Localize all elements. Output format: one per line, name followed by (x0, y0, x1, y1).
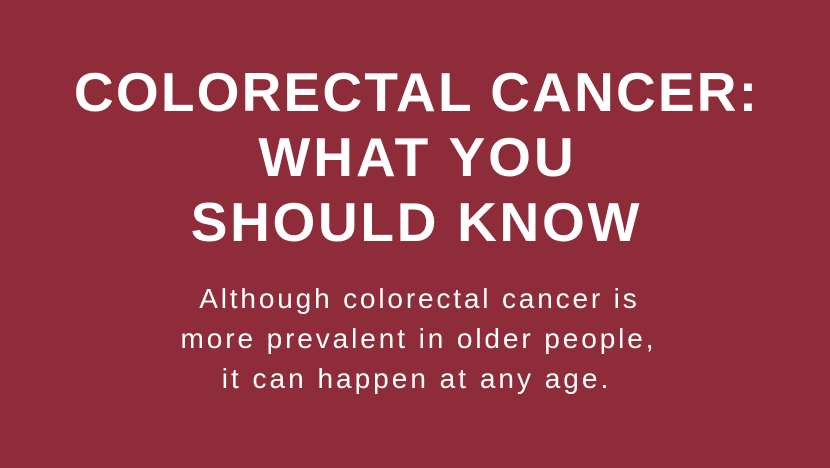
title: WHAT YOU (258, 126, 577, 188)
subtitle text (181, 283, 656, 394)
subtitle text: more prevalent in older people, (181, 323, 656, 354)
title: SHOULD KNOW (191, 191, 642, 253)
title: COLORECTAL CANCER: (74, 61, 759, 123)
subtitle text: Although colorectal cancer is (199, 283, 640, 314)
subtitle text: it can happen at any age. (222, 363, 611, 394)
title (74, 61, 759, 253)
